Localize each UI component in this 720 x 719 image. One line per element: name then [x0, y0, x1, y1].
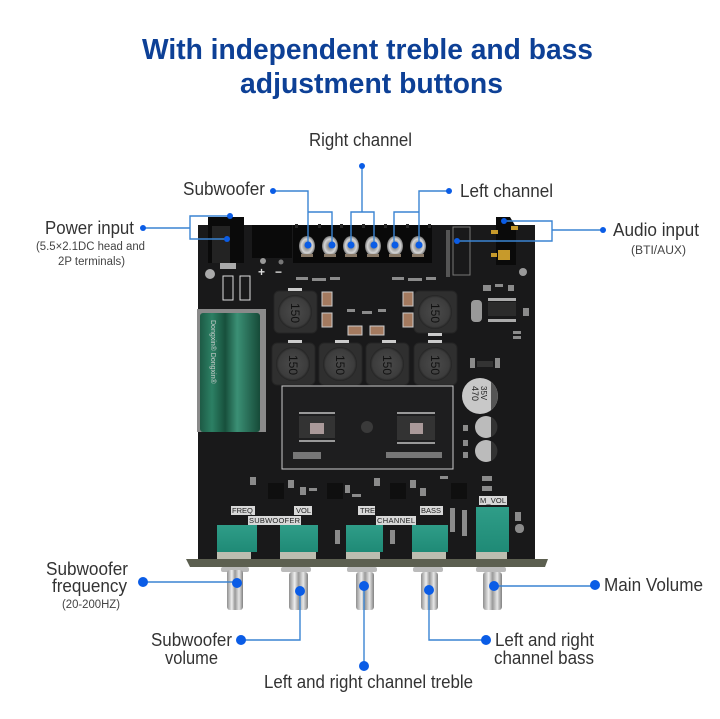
label: bass: Left and right [495, 630, 594, 650]
470uF capacitor: 35V [479, 386, 488, 401]
label: bass: channel bass [494, 648, 594, 668]
small capacitors near inductors [322, 292, 413, 335]
amplifier section outline [282, 386, 453, 469]
470uF capacitor: 470 [470, 386, 480, 401]
potentiometers [217, 507, 509, 559]
label: power input: (5.5×2.1DC head and [36, 241, 145, 253]
inductors: 150 [333, 355, 347, 375]
label: right channel: Right channel [309, 130, 412, 150]
inductors: 150 [428, 355, 442, 375]
inductors: 150 [380, 355, 394, 375]
label: audio input: (BTI/AUX) [631, 245, 686, 257]
label: audio input [613, 220, 699, 257]
silkscreen labels: BASS [421, 506, 441, 515]
label: audio input: Audio input [613, 220, 699, 240]
label: subwoofer frequency: frequency [52, 576, 127, 596]
label: subwoofer: Subwoofer [183, 179, 265, 199]
silkscreen labels: CHANNEL [377, 516, 415, 525]
electrolytic capacitor: Dongxin® Dongxin® [209, 320, 217, 384]
title: With independent treble and bass [142, 34, 593, 66]
silkscreen labels: SUBWOOFER [249, 516, 301, 525]
speaker terminal block [293, 224, 432, 263]
control chip [471, 298, 516, 322]
silkscreen labels [231, 496, 507, 525]
label: main volume: Main Volume [604, 575, 703, 595]
silkscreen labels: VOL [296, 506, 311, 515]
2P terminal [252, 225, 292, 279]
label: power input: 2P terminals) [58, 256, 125, 268]
callout lines [143, 166, 603, 666]
label: subwoofer volume [151, 630, 232, 668]
label: subwoofer volume: volume [165, 648, 218, 668]
Bluetooth module [446, 227, 470, 277]
amplifier board [186, 217, 548, 610]
470uF capacitor [462, 378, 498, 414]
power jack [205, 217, 244, 279]
label: power input [36, 218, 145, 268]
silkscreen labels: FREQ [232, 506, 253, 515]
knobs [221, 567, 506, 610]
label: subwoofer volume: Subwoofer [151, 630, 232, 650]
audio jack [491, 217, 527, 276]
diodes [223, 276, 250, 300]
label: subwoofer frequency [46, 559, 128, 611]
title [142, 34, 593, 100]
callout dots [138, 163, 606, 671]
label: subwoofer frequency: Subwoofer [46, 559, 128, 579]
inductors: 150 [286, 355, 300, 375]
label: bass [494, 630, 594, 668]
inductors: 150 [288, 303, 302, 323]
inductors [272, 288, 457, 385]
silkscreen labels: M_VOL [480, 496, 506, 505]
label: subwoofer frequency: (20-200HZ) [62, 599, 120, 611]
small electrolytic capacitors [475, 416, 497, 462]
2P terminal: − [275, 265, 282, 279]
label: treble: Left and right channel treble [264, 672, 473, 692]
electrolytic capacitor [197, 309, 266, 432]
metal front plate [186, 559, 548, 567]
label: power input: Power input [45, 218, 134, 238]
label: left channel: Left channel [460, 181, 553, 201]
op-amp chips [268, 483, 467, 499]
inductors: 150 [428, 303, 442, 323]
PCB [198, 225, 535, 560]
SMD parts [250, 277, 529, 544]
silkscreen labels: TRE [360, 506, 375, 515]
2P terminal: + [258, 265, 265, 279]
title: adjustment buttons [240, 68, 503, 100]
